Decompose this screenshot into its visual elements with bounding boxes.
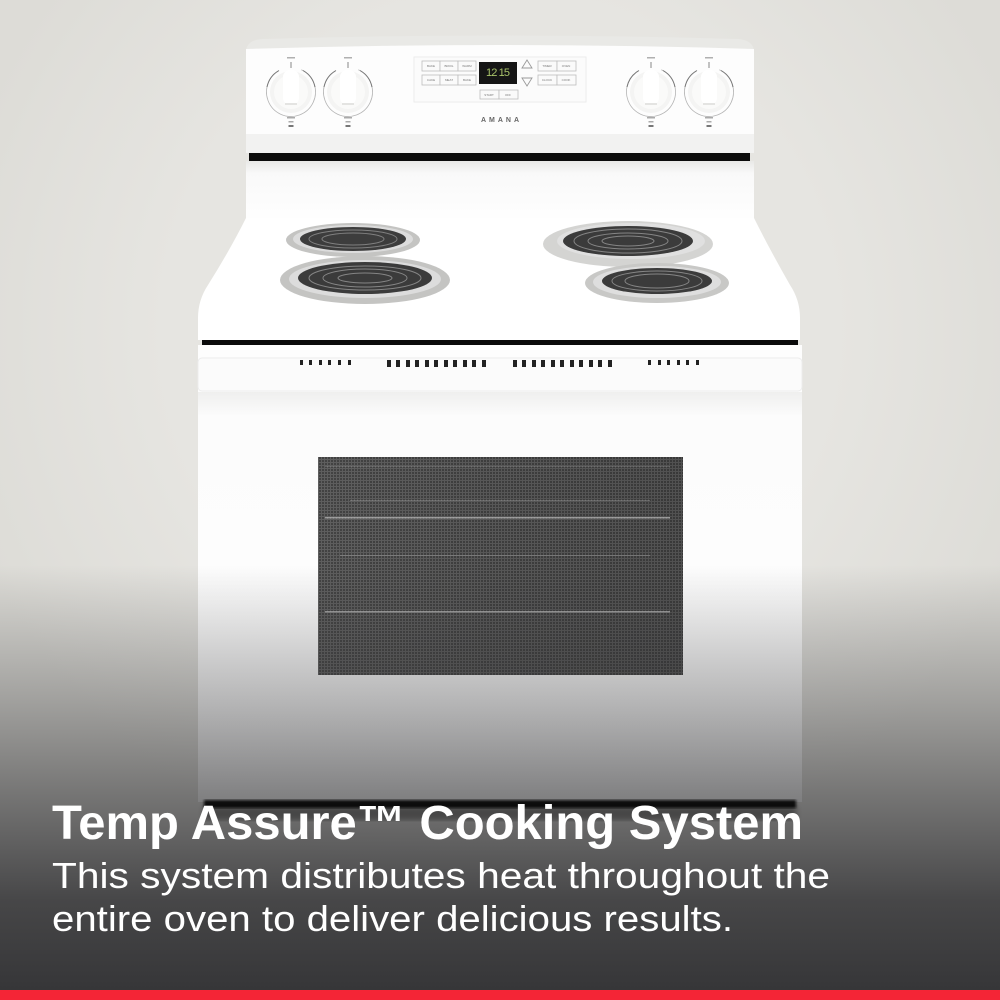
burner: left rear xyxy=(286,223,420,257)
knob: left front xyxy=(315,57,381,127)
burner: left front xyxy=(280,256,450,304)
body text line one: This system distributes heat throughout the xyxy=(52,855,830,896)
display clock xyxy=(479,62,517,84)
control panel: CLOCK xyxy=(542,78,552,82)
control panel: BAKE xyxy=(463,78,471,82)
range base shadow xyxy=(204,800,796,820)
vent band xyxy=(198,345,802,395)
oven range xyxy=(198,36,802,802)
oven door xyxy=(198,392,802,802)
burner: right front xyxy=(585,263,729,303)
body text line two: entire oven to deliver delicious results. xyxy=(52,898,733,939)
control console xyxy=(246,45,754,153)
control panel: MEAT xyxy=(445,78,453,82)
caption xyxy=(52,797,830,939)
control panel: WARM xyxy=(462,64,472,68)
cooktop front slit xyxy=(202,340,798,345)
control panel: START xyxy=(484,93,494,97)
knob: right rear xyxy=(676,57,742,127)
red footer bar xyxy=(0,990,1000,1000)
control panel: BAKE xyxy=(427,64,435,68)
console slit xyxy=(249,153,750,161)
control panel: OFF xyxy=(505,93,511,97)
backsplash xyxy=(246,161,754,223)
oven window xyxy=(318,457,683,675)
control panel: COOK xyxy=(562,78,570,82)
console top trim xyxy=(246,36,754,60)
vent slots xyxy=(300,360,699,367)
control panel: CAKE xyxy=(427,78,435,82)
cooktop xyxy=(198,218,800,340)
heading: Temp Assure™ Cooking System xyxy=(52,797,803,850)
control panel: BROIL xyxy=(444,64,454,68)
dark gradient overlay xyxy=(0,565,1000,990)
knob: right front xyxy=(618,57,684,127)
knob: left rear xyxy=(258,57,324,127)
burner: right rear xyxy=(543,221,713,267)
control panel: OVEN xyxy=(562,64,570,68)
up and down arrows xyxy=(522,60,532,86)
control panel xyxy=(414,57,586,102)
door handle xyxy=(198,358,802,391)
brand name: AMANA xyxy=(481,117,519,124)
control panel: TIMER xyxy=(542,64,552,68)
display clock: 12 15 xyxy=(486,67,510,79)
